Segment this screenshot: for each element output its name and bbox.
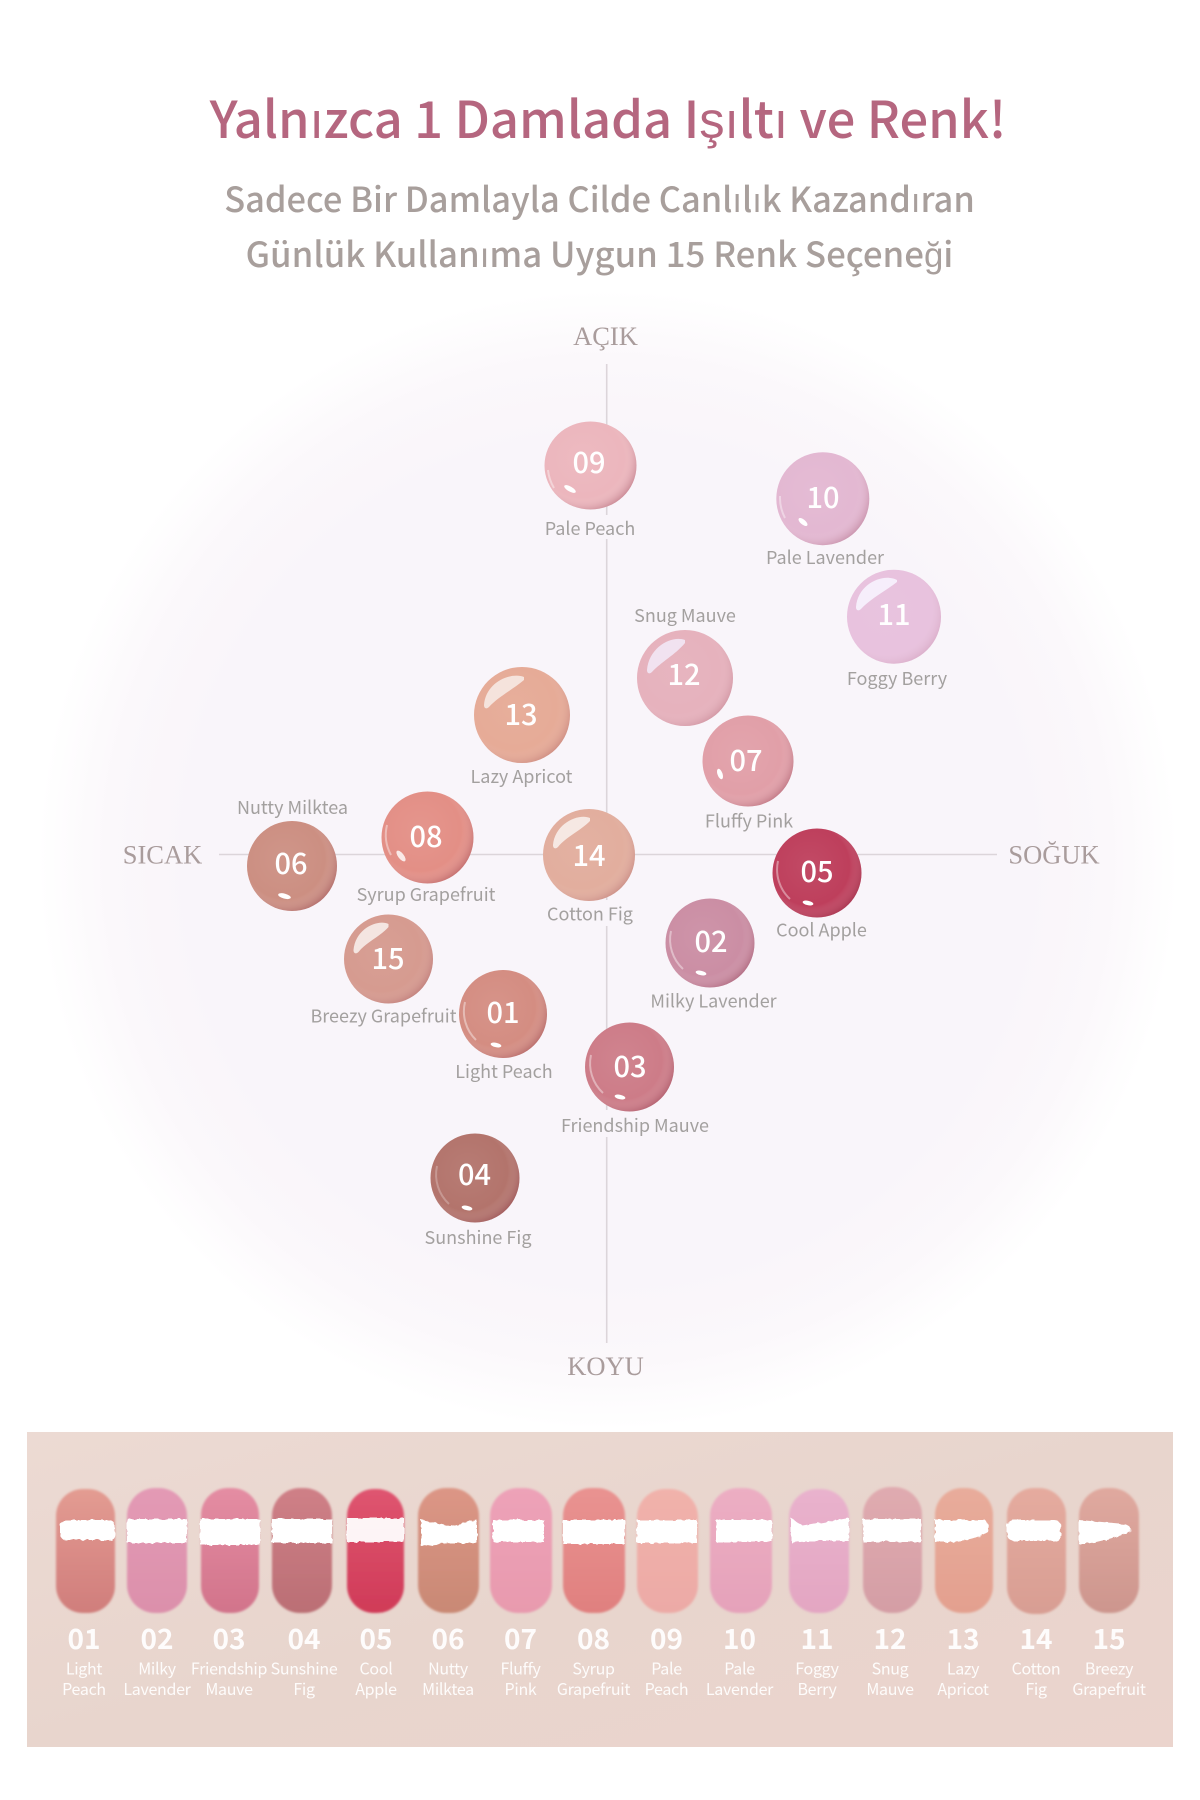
swatch names: Milktea [422,1676,474,1700]
swatch names: Fig [1025,1676,1047,1700]
bubble 08 [382,792,474,884]
bubble name labels: Snug Mauve [634,602,736,628]
bubble 02: 02 [694,919,728,961]
bubble 04: 04 [458,1152,491,1194]
swatch names: Peach [62,1676,106,1700]
swatch numbers: 07 [504,1618,537,1658]
swatch names: Sunshine [271,1656,338,1680]
swatch numbers [67,1618,1126,1658]
axes [219,364,997,1343]
bubble 01 [459,970,547,1058]
bubble 15: 15 [371,936,405,978]
bubble 04 [430,1134,520,1222]
swatch names: Syrup [572,1656,615,1680]
swatch names: Apricot [937,1676,989,1700]
swatch numbers: 06 [431,1618,465,1658]
bubble name labels: Sunshine Fig [425,1224,531,1250]
bubble 05 [772,828,862,918]
bubble 13 [474,667,570,763]
swatch numbers: 01 [67,1618,101,1658]
background glow [38,290,1178,1430]
bubble name labels: Breezy Grapefruit [310,1002,457,1028]
bubble 14 [543,809,635,901]
white bands [60,1518,1131,1546]
swatch panel [27,1432,1173,1747]
swatch names: Nutty [428,1656,469,1680]
swatch names: Fig [293,1676,315,1700]
bubble 01: 01 [486,990,520,1032]
swatch names: Pale [651,1656,682,1680]
swatch names: Cool [360,1656,392,1680]
swatch names: Light [66,1656,102,1680]
swatch names: Cotton [1012,1656,1060,1680]
title: Yalnızca 1 Damlada Işıltı ve Renk! [209,79,1006,153]
subtitle: Günlük Kullanıma Uygun 15 Renk Seçeneği [246,228,953,278]
bubble 06 [247,821,337,911]
bubble name labels: Cool Apple [776,916,867,942]
swatch numbers: 02 [140,1618,174,1658]
bubble name labels: Cotton Fig [547,900,633,926]
bubble 11 [847,570,941,664]
bubble name labels: Pale Peach [545,515,635,541]
swatch names: Berry [797,1676,838,1700]
label masks over axes [600,515,614,1137]
bubble 14: 14 [572,833,606,875]
subtitle [224,172,975,278]
bubble 10: 10 [806,475,840,517]
swatch numbers: 11 [800,1618,834,1658]
swatch numbers: 05 [359,1618,393,1658]
swatch names: Mauve [866,1676,914,1700]
bubble 12 [637,630,733,726]
bubble 09: 09 [572,440,606,482]
bubble 09 [544,422,636,510]
bubble name labels: Pale Lavender [766,544,885,570]
axis label: cool: SOĞUK [1008,840,1100,870]
bubble name labels [237,515,948,1250]
swatch pills [56,1487,1139,1614]
bubble 08: 08 [409,814,443,856]
axis label: dark: KOYU [567,1351,644,1381]
swatch names: Peach [645,1676,688,1700]
subtitle: Sadece Bir Damlayla Cilde Canlılık Kazandıran [224,172,975,222]
bubble name labels: Lazy Apricot [471,763,573,789]
swatch names: Pale [724,1656,755,1680]
swatch numbers: 12 [873,1618,907,1658]
swatch names: Breezy [1085,1656,1134,1680]
axis label: light: AÇIK [573,321,638,351]
bubble name labels: Milky Lavender [650,988,778,1014]
bubble 03: 03 [613,1044,647,1086]
swatch numbers: 15 [1092,1618,1126,1658]
swatch names: Grapefruit [1072,1676,1146,1700]
bubble 13: 13 [504,692,538,734]
bubble 06: 06 [274,841,308,883]
swatch names: Snug [872,1656,909,1680]
swatch numbers: 08 [577,1618,610,1658]
swatch numbers: 13 [946,1618,980,1658]
swatch names: Milky [138,1656,177,1680]
bubble 10 [776,452,869,545]
swatch names: Fluffy [500,1656,541,1680]
bubble 12: 12 [667,652,701,694]
bubble 07 [702,716,794,806]
bubble 07: 07 [729,738,763,780]
swatch names: Apple [355,1676,397,1700]
bubble 15 [344,914,433,1004]
swatch names: Grapefruit [557,1676,630,1700]
swatch names: Lazy [947,1656,980,1680]
bubble name labels: Friendship Mauve [561,1112,709,1138]
bubble name labels: Fluffy Pink [705,808,793,834]
swatch numbers: 04 [287,1618,321,1658]
bubble name labels: Nutty Milktea [237,794,348,820]
bubble 02 [666,898,754,988]
bubble name labels: Syrup Grapefruit [357,881,496,907]
bubble name labels: Foggy Berry [847,665,948,691]
swatch numbers: 14 [1019,1618,1053,1658]
swatch numbers: 10 [723,1618,756,1658]
bubble 11: 11 [877,592,911,634]
bubble name labels: Light Peach [455,1058,553,1084]
swatch names [62,1656,1146,1700]
axis label: warm: SICAK [123,840,202,870]
swatch names: Friendship [191,1656,267,1680]
swatch names: Lavender [123,1676,192,1700]
swatch names: Pink [505,1676,537,1700]
swatch names: Mauve [205,1676,253,1700]
bubble 05: 05 [800,849,834,891]
bubble 03 [585,1022,674,1112]
swatch numbers: 03 [212,1618,246,1658]
swatch names: Lavender [706,1676,774,1700]
swatch numbers: 09 [650,1618,683,1658]
swatch names: Foggy [795,1656,840,1680]
